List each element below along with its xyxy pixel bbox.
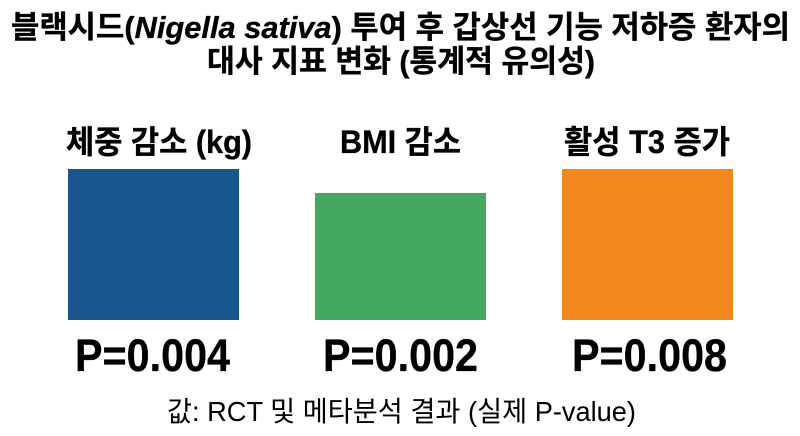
p-value: active T3 increase: P=0.008 [572,330,727,381]
footnote: 값: RCT 및 메타분석 결과 (실제 P-value) [167,396,636,427]
bar: active T3 increase [562,169,733,320]
panel: active T3 increase [562,124,733,381]
bar: weight loss [68,169,239,320]
p-value: BMI loss: P=0.002 [323,330,478,381]
title: 대사 지표 변화 (통계적 유의성) [207,44,595,79]
heading: BMI loss: BMI 감소 [340,124,461,160]
title: 블랙시드(Nigella sativa) 투여 후 갑상선 기능 저하증 환자의 [11,10,790,45]
heading: weight loss: 체중 감소 (kg) [66,124,252,160]
title [11,10,790,79]
heading: active T3 increase: 활성 T3 증가 [564,124,730,160]
panel: BMI loss [315,124,486,381]
panel: weight loss [66,124,252,381]
bar: BMI loss [315,193,486,320]
p-value: weight loss: P=0.004 [75,330,230,381]
